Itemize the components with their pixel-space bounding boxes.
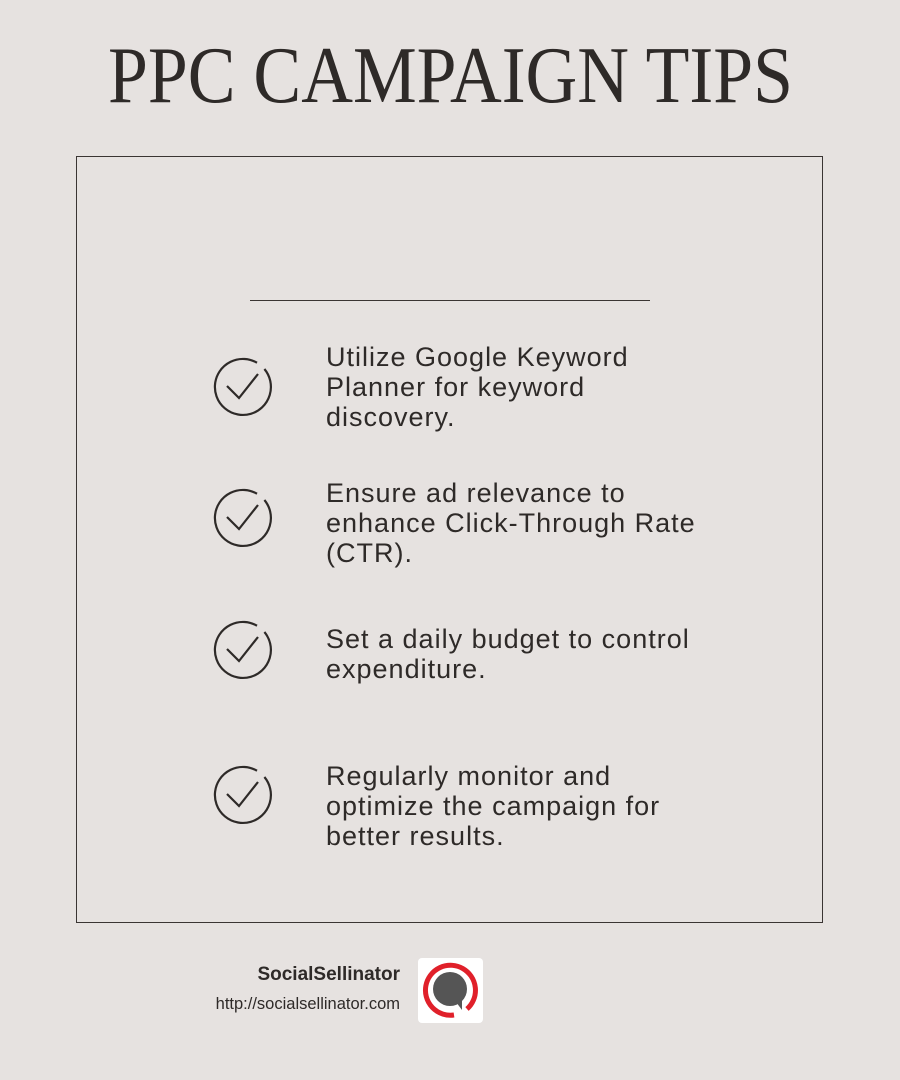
icon: check 2 bbox=[214, 488, 272, 547]
footer brand bbox=[216, 964, 400, 1013]
divider line bbox=[250, 300, 650, 301]
icon: logo bbox=[418, 958, 483, 1023]
text: tip 1 bbox=[326, 342, 629, 432]
icon: check 3 bbox=[214, 620, 272, 679]
text: tip 2: enhance Click-Through Rate bbox=[326, 508, 696, 538]
text: tip 2: Ensure ad relevance to bbox=[326, 478, 626, 508]
footer brand: SocialSellinator bbox=[257, 964, 400, 985]
footer brand: http://socialsellinator.com bbox=[216, 995, 400, 1013]
text: tip 1: discovery. bbox=[326, 402, 456, 432]
text: tip 4 bbox=[326, 761, 660, 851]
text: tip 3: Set a daily budget to control bbox=[326, 624, 690, 654]
text: tip 2: (CTR). bbox=[326, 538, 413, 568]
text: tip 3: expenditure. bbox=[326, 654, 487, 684]
title: PPC CAMPAIGN TIPS bbox=[108, 32, 793, 120]
text: tip 4: optimize the campaign for bbox=[326, 791, 660, 821]
icon: check 1 bbox=[214, 358, 272, 416]
text: tip 2 bbox=[326, 478, 696, 568]
text: tip 1: Utilize Google Keyword bbox=[326, 342, 629, 372]
icon: check 4 bbox=[214, 766, 272, 824]
text: tip 4: better results. bbox=[326, 821, 505, 851]
text: tip 4: Regularly monitor and bbox=[326, 761, 611, 791]
panel: tips box bbox=[76, 156, 823, 923]
text: tip 3 bbox=[326, 624, 690, 684]
text: tip 1: Planner for keyword bbox=[326, 372, 585, 402]
